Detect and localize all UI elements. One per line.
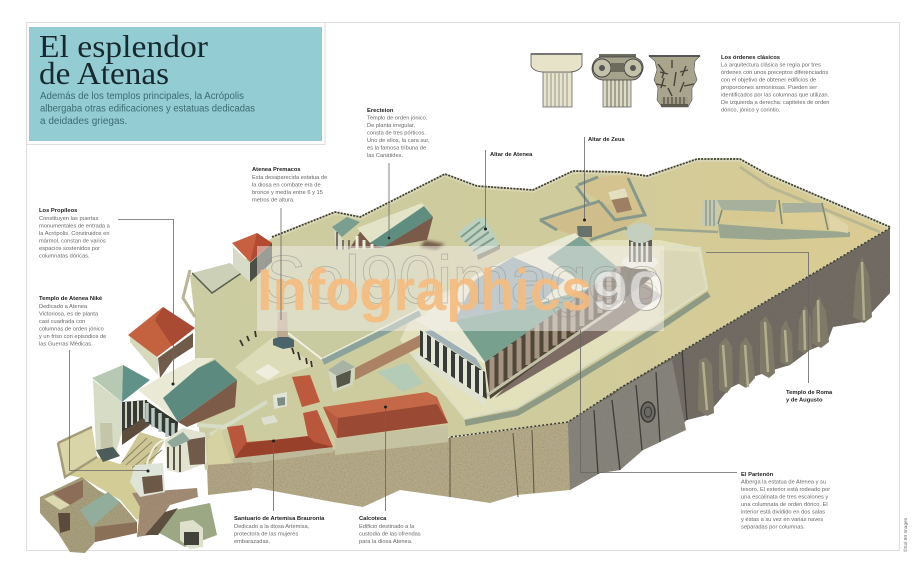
hill: west stone wall [207,422,570,507]
Parthenon green roof slope [455,288,590,362]
text: Los ordenes clasicos: La arquitectura clásica se regía por tres [721,62,821,68]
tan panel [207,427,232,465]
icon: Ionic capital [592,54,643,107]
title: de Atenas [39,55,169,91]
Erecteion [332,203,445,258]
callout: Templo de Atenea Nike: Dedicado a Atenea [39,304,88,310]
callout: Templo de Atenea Nike: Templo de Atenea Niké [39,296,103,302]
ground surface [190,160,890,470]
Nike temple [165,428,207,473]
text: Los ordenes clasicos: órdenes con unos preceptos diferenciados [721,70,828,76]
Santuario de Artemisa Brauronia [227,375,333,466]
left green-roof wing [92,365,150,462]
callout: Santuario de Artemisa Brauronia [234,440,325,545]
callout: Calcoteca [359,406,421,545]
central columns [145,400,178,440]
Parthenon open interior [455,257,565,320]
Parthenon west front [415,319,488,408]
callout: Templo de Atenea Nike: Victoriosa, es de planta [39,312,99,318]
callout: El Partenon: interior está dividido en dos salas [741,510,825,516]
watermark band [257,242,664,331]
credit: ©Sol 90 Images [902,517,909,552]
brown side walls [178,380,237,427]
terrace and statue forecourt [235,248,420,385]
callout: Templo de Roma y de Augusto [706,252,833,404]
callout: Erecteion: De planta irregular, [367,123,415,129]
callout: Atenea Premacos: la diosa en combate era de [252,182,321,188]
watermark main text: Infographics [257,258,592,323]
callout: Erecteion: es la famosa tribuna de [367,146,426,152]
forecourt [67,457,165,520]
callout: El Partenon [580,330,830,530]
stairs [120,432,165,470]
title: El esplendor [39,28,208,64]
Parthenon roof base [417,233,617,362]
callout: Santuario de Artemisa Brauronia: embarazadas. [234,539,270,545]
Altar de Zeus enclosure [540,175,645,240]
text: Los ordenes clasicos: con el objetivo de obtener edificios de [721,78,816,84]
text: Los ordenes clasicos: identificados por las columnas que utilizan. [721,92,830,98]
long wall to Santuario [197,402,267,435]
small monument [130,463,165,497]
Calcoteca [323,392,448,455]
callout: Erecteion: consta de tres pórticos. [367,130,426,136]
icon: Corinthian capital [649,55,700,107]
text: Los ordenes clasicos: dórico, jónico y corintio. [721,108,781,114]
callout: Santuario de Artemisa Brauronia: protectora de las mujeres [234,532,298,538]
orange-roof square block [128,307,195,378]
Altar de Atenea [457,218,500,260]
text: Los ordenes clasicos: Los órdenes clásicos [721,55,780,61]
callout: Los Propileos [39,208,174,386]
callout: El Partenon: una columnata de orden dórico. El [741,502,828,508]
callout: Los Propileos: Constituyen las puertas [39,216,99,222]
callout: Los Propileos: espacios sostenidos por [39,246,100,252]
watermark number: 90 [592,259,664,322]
text: Los ordenes clasicos: proporciones armoniosas. Pueden ser [721,85,817,91]
callout: Los Propileos: monumentales de entrada a [39,224,111,230]
platform retaining wall [404,247,707,418]
Parthenon south colonnade [483,265,655,399]
Parthenon platform [400,240,707,418]
Parthenon [415,233,655,408]
intro text: albergaba otras edificaciones y estatuas dedicadas [40,104,255,114]
panel: classical orders capitals [531,53,830,114]
callout: Erecteion: Uno de ellos, la cara sur, [367,138,430,144]
callout: El Partenon: tesoro. El exterior está rodeado por [741,487,830,493]
callout: Templo de Atenea Nike: columnas de orden jónico [39,326,104,332]
central temple cream roof [138,358,215,422]
callout: Altar de Zeus [583,137,625,222]
callout: Calcoteca: Edificio destinado a la [359,524,415,530]
callout: Calcoteca: custodia de las ofrendas [359,532,421,538]
title panel [26,22,325,144]
text: Los ordenes clasicos: De izquierda a derecha: capiteles de orden [721,100,829,106]
callout: Templo de Atenea Nike: y un friso con episodios de [39,334,106,340]
callout: Erecteion [367,108,430,239]
callout: El Partenon: Alberga la estatua de Atenea y su [741,480,826,486]
lower left block [40,477,137,553]
callout: El Partenon: y éstas a su vez en varias naves [741,517,823,523]
Atenea Premacos statue [273,312,294,349]
callout: El Partenon: una escalinata de tres escalones y [741,494,828,500]
callout: Erecteion: Templo de orden jónico. [367,116,428,122]
callout: Altar de Zeus: Altar de Zeus [588,137,625,143]
stair court and small gate [328,335,423,392]
callout: Erecteion: Erecteion [367,108,394,114]
callout: El Partenon: separadas por columnas. [741,524,805,530]
NW building [183,233,272,317]
callout: Atenea Premacos: Esta desaparecida estatua de [252,175,327,181]
callout: Los Propileos: columnatas dóricas. [39,254,90,260]
icon: Doric capital [531,53,582,107]
Propileos [40,307,252,553]
callout: Templo de Roma y de Augusto: y de Augusto [786,398,823,404]
callout: Altar de Atenea: Altar de Atenea [490,152,533,158]
intro text: a deidades griegas. [40,116,127,127]
callout: Templo de Atenea Nike [39,296,150,472]
stone below panel [208,462,252,495]
north parapet [272,160,890,238]
central temple green roof [163,360,237,422]
illustration: Acropolis [40,159,890,553]
callout: Atenea Premacos: bronce y medía entre 6 y 15 [252,190,323,196]
west enclosure [58,427,97,477]
intro text: Además de los templos principales, la Acrópolis [40,91,244,102]
callout: Santuario de Artemisa Brauronia: Dedicado a la diosa Artemisa, [234,524,310,530]
callout: Atenea Premacos: Atenea Premacos [252,167,301,173]
bushes and shrine [145,503,217,549]
lower stone ramp [132,488,198,537]
callout: Erecteion: las Cariátides. [367,153,403,159]
Rotunda: Templo de Roma y de Augusto [622,223,658,269]
Parthenon shadow [495,280,662,398]
callout: Los Propileos: mármol, constan de varios [39,238,106,244]
Parthenon far roof [547,236,617,288]
callout: Templo de Atenea Nike: las Guerras Médicas. [39,342,93,348]
callout: Altar de Atenea [484,150,533,230]
callout: Atenea Premacos [252,167,327,320]
callout: Santuario de Artemisa Brauronia: Santuario de Artemisa Brauronia [234,516,325,522]
callout: Templo de Roma y de Augusto: Templo de Roma [786,390,833,396]
callout: Los Propileos: la Acrópolis. Construidos en [39,231,110,237]
callout: Los Propileos: Los Propíleos [39,208,77,214]
callout: El Partenon: El Partenón [741,472,774,478]
callout: Templo de Atenea Nike: casi cuadrada con [39,319,85,325]
callout: Calcoteca: Calcoteca [359,516,387,522]
callout: Atenea Premacos: metros de altura. [252,198,295,204]
watermark outline text: Sol90images [260,242,660,318]
callout: Calcoteca: para la diosa Atenea. [359,539,413,545]
hill: east dark wall [568,228,890,490]
east walled complex [655,200,850,240]
north east inner wall [740,167,880,232]
